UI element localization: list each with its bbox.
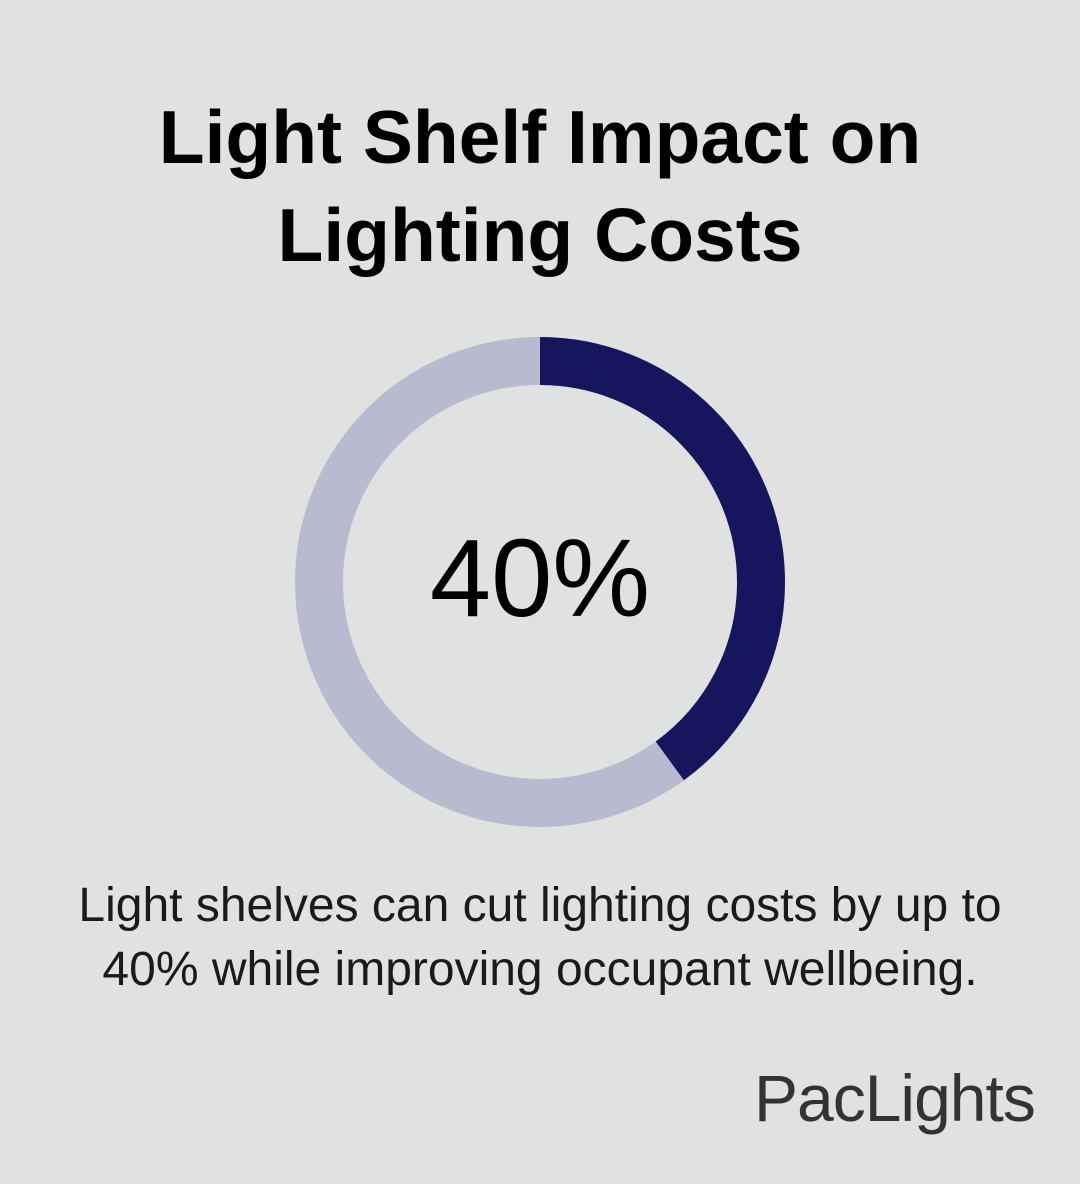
title: Light Shelf Impact on [159, 95, 921, 179]
title: Lighting Costs [278, 193, 802, 277]
donut chart: 40% [430, 517, 650, 640]
title [159, 95, 921, 277]
description text: 40% while improving occupant wellbeing. [102, 943, 978, 996]
description text [78, 879, 1002, 996]
logo: PacLights [754, 1061, 1035, 1135]
description text: Light shelves can cut lighting costs by up to [78, 879, 1002, 932]
